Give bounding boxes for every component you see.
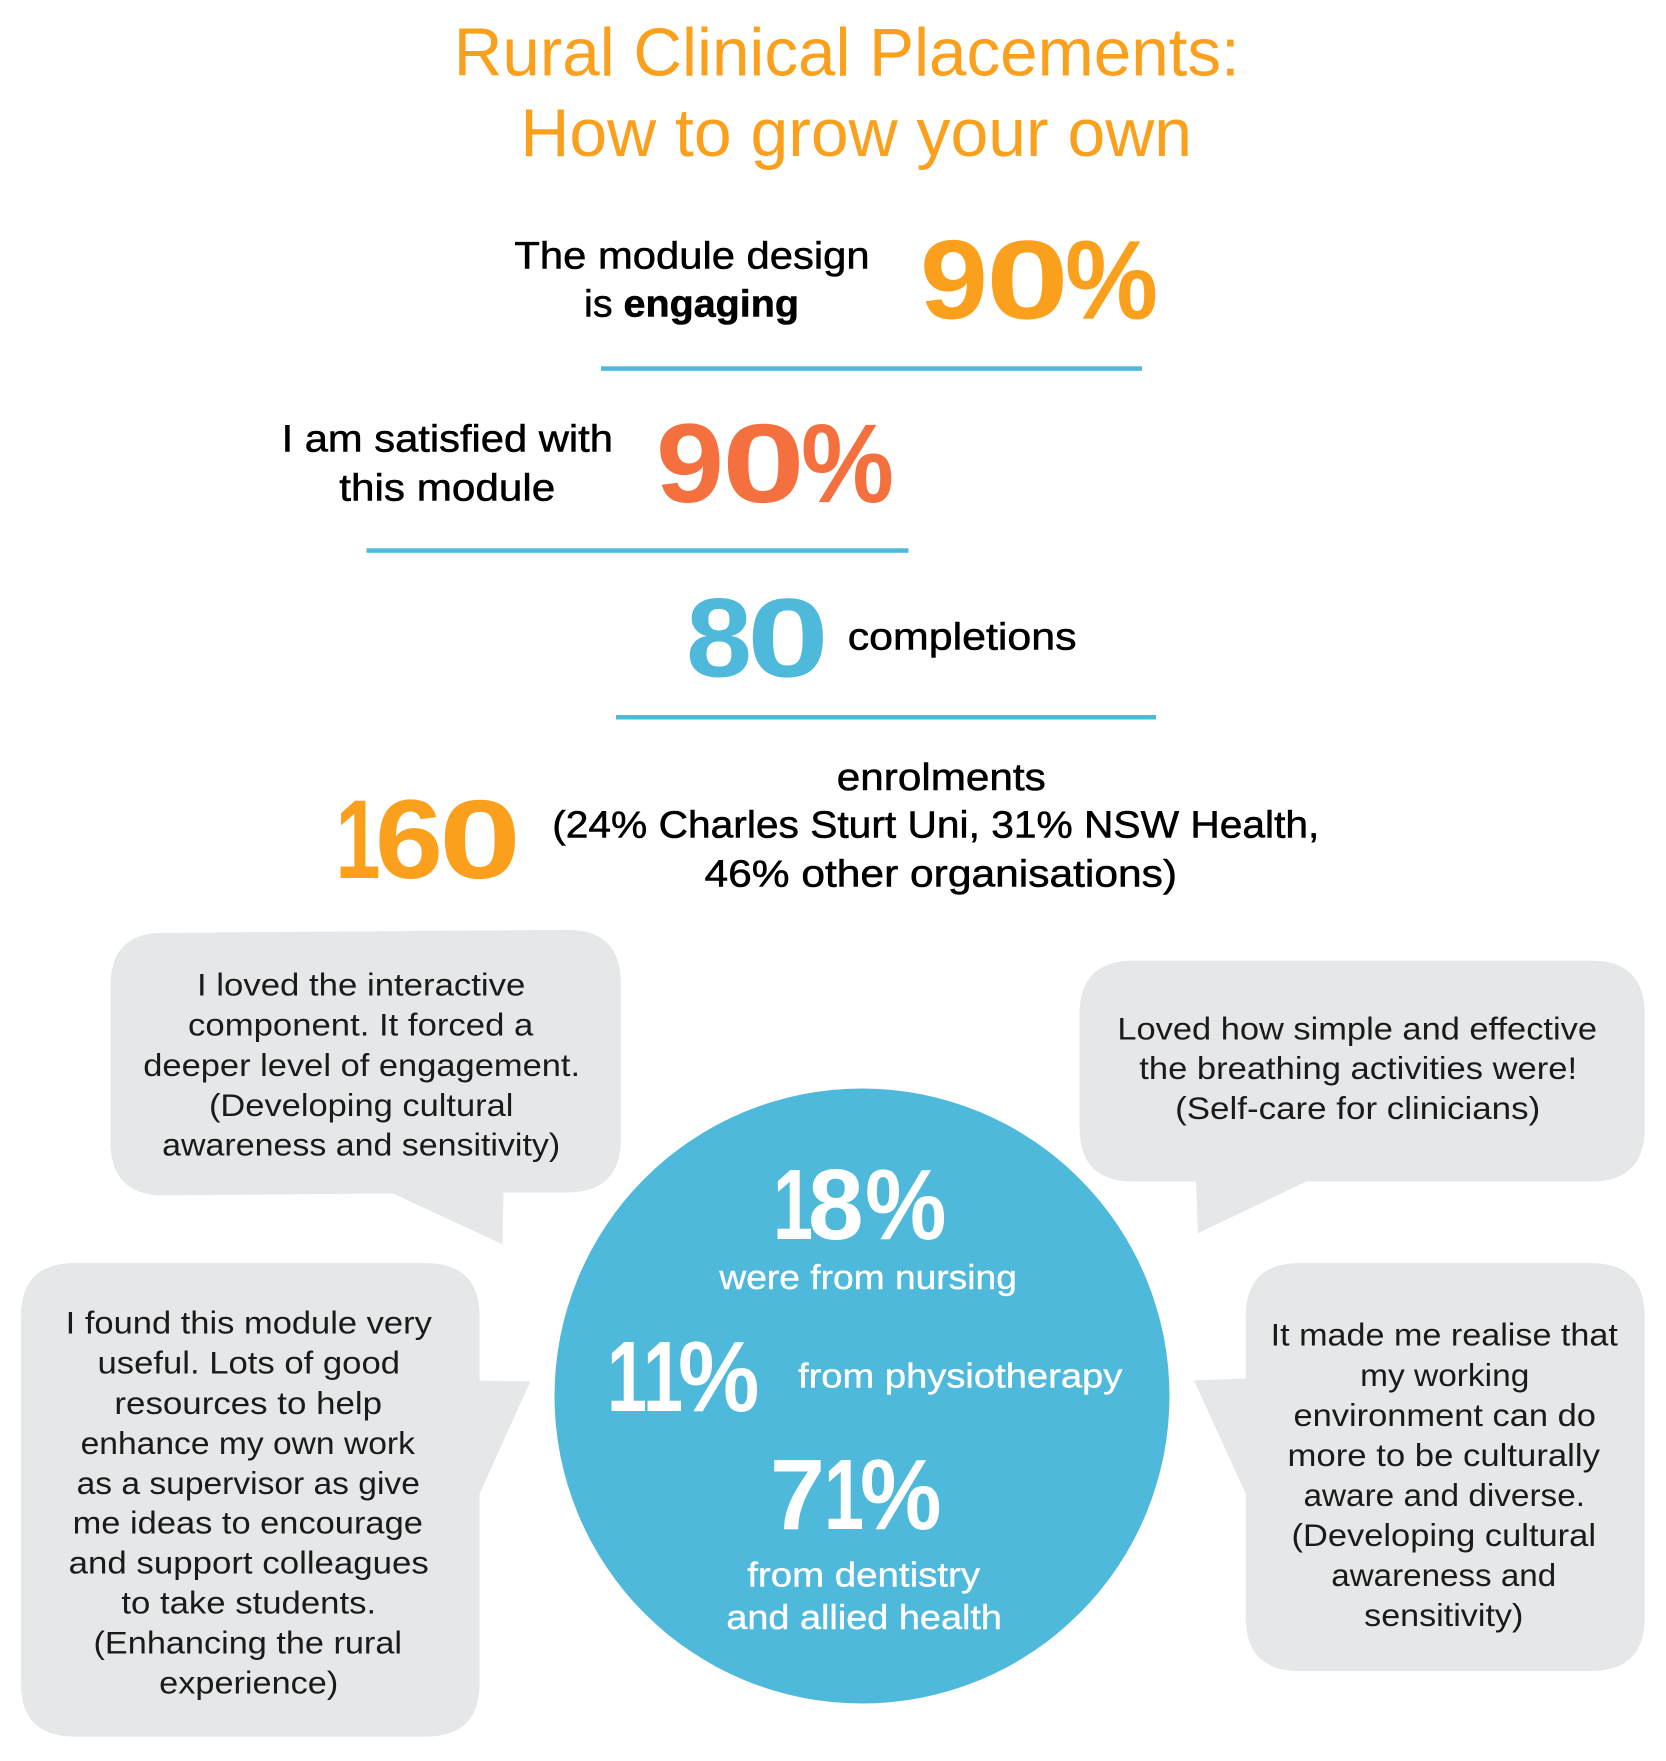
bubble shape with tail (1194, 1263, 1645, 1671)
stat: 18% nursing (718, 1149, 1017, 1297)
quote text: and support colleagues (69, 1544, 429, 1580)
quote text (143, 967, 580, 1163)
stat: 18% nursing: 8 (808, 1149, 864, 1261)
stat: 18% nursing: were from nursing (718, 1259, 1017, 1297)
number: 90% satisfied (656, 401, 894, 526)
speech bubble: top left quote (110, 930, 621, 1244)
quote text: component. It forced a (188, 1006, 534, 1042)
number: 90% engaging (920, 218, 1158, 342)
panel: discipline breakdown circle (554, 1088, 1170, 1704)
quote text: Loved how simple and effective (1117, 1010, 1597, 1046)
stat: enrolments (336, 757, 1319, 902)
quote text: It made me realise that (1271, 1317, 1618, 1353)
number: 90% satisfied: 0 (722, 401, 805, 526)
quote text: awareness and sensitivity) (162, 1127, 560, 1163)
label: I am satisfied with this module (282, 419, 613, 509)
stat: 71% dentistry and allied health: % (860, 1439, 942, 1551)
quote text: as a supervisor as give (77, 1465, 420, 1501)
quote text: my working (1360, 1357, 1529, 1393)
quote text: (Developing cultural (209, 1087, 513, 1123)
speech bubble: bottom right quote (1194, 1263, 1645, 1671)
label: enrolments breakdown: 46% other organisations) (704, 853, 1177, 895)
label: the module design is engaging: is engaging (584, 283, 799, 325)
stat: 18% nursing: % (865, 1149, 946, 1261)
label: completions: completions (848, 617, 1077, 659)
stat: 11% physiotherapy: from physiotherapy (798, 1357, 1122, 1395)
number: 160: 1 (336, 777, 380, 902)
stat: completions (686, 576, 1077, 700)
quote text: (Enhancing the rural (94, 1625, 402, 1661)
circle background (554, 1088, 1170, 1704)
number: 90% engaging: % (1065, 218, 1158, 342)
quote text: more to be culturally (1288, 1437, 1600, 1473)
quote text: sensitivity) (1364, 1597, 1523, 1633)
quote text (1117, 1010, 1597, 1126)
stat: 11% physiotherapy: 1 (607, 1321, 647, 1433)
stat: 71% dentistry and allied health: 1 (824, 1439, 864, 1551)
quote text: environment can do (1294, 1397, 1596, 1433)
stat: 71% dentistry and allied health: from dentistry (747, 1556, 980, 1594)
label: I am satisfied with this module: this module (339, 467, 555, 509)
quote text: (Self-care for clinicians) (1175, 1090, 1540, 1126)
label: enrolments breakdown (552, 757, 1319, 895)
bubble shape with tail (21, 1263, 530, 1737)
number: 80: 0 (747, 576, 829, 700)
quote text: to take students. (121, 1584, 376, 1620)
stat: module design engaging (514, 218, 1158, 342)
quote text: resources to help (114, 1385, 382, 1421)
title (454, 16, 1240, 171)
number: 90% satisfied: % (801, 401, 894, 526)
number: 160: 6 (375, 777, 443, 902)
label: I am satisfied with this module: I am satisfied with (282, 419, 613, 461)
label: the module design is engaging (514, 236, 870, 325)
quote text: enhance my own work (81, 1425, 415, 1461)
bubble shape with tail (110, 930, 621, 1244)
quote text: the breathing activities were! (1139, 1050, 1577, 1086)
quote text: experience) (159, 1664, 338, 1700)
stat: 71% dentistry and allied health (726, 1439, 1002, 1637)
title: Rural Clinical Placements: (454, 16, 1240, 91)
label: enrolments breakdown: enrolments (837, 757, 1046, 799)
quote text: I found this module very (66, 1305, 432, 1341)
quote text: me ideas to encourage (73, 1505, 423, 1541)
quote text: useful. Lots of good (98, 1345, 400, 1381)
stat: 11% physiotherapy (607, 1321, 1122, 1433)
number: 160: 0 (439, 777, 521, 902)
quote text (1271, 1317, 1618, 1633)
stat: 18% nursing: 1 (773, 1149, 813, 1261)
speech bubble: bottom left quote (21, 1263, 530, 1737)
stat: 11% physiotherapy: % (678, 1321, 760, 1433)
title: How to grow your own (520, 96, 1192, 171)
stat: 71% dentistry and allied health: and allied health (726, 1599, 1002, 1637)
quote text (66, 1305, 432, 1700)
quote text: awareness and (1331, 1557, 1556, 1593)
label: the module design is engaging: The module design (514, 236, 870, 278)
quote text: deeper level of engagement. (143, 1047, 580, 1083)
number: 90% engaging: 9 (920, 218, 988, 342)
speech bubble: top right quote (1080, 961, 1645, 1233)
number: 80: 8 (686, 576, 752, 700)
quote text: I loved the interactive (197, 967, 525, 1003)
number: 80 (686, 576, 829, 700)
number: 90% satisfied: 9 (656, 401, 724, 526)
stat: satisfied with module (282, 401, 894, 526)
stat: 11% physiotherapy: 1 (643, 1321, 683, 1433)
number: 160 (336, 777, 521, 902)
number: 90% engaging: 0 (986, 218, 1069, 342)
stat: 71% dentistry and allied health: 7 (770, 1439, 825, 1551)
bubble shape with tail (1080, 961, 1645, 1233)
quote text: (Developing cultural (1292, 1517, 1596, 1553)
quote text: aware and diverse. (1303, 1477, 1585, 1513)
label: enrolments breakdown: (24% Charles Sturt Uni, 31% NSW Health, (552, 805, 1319, 847)
